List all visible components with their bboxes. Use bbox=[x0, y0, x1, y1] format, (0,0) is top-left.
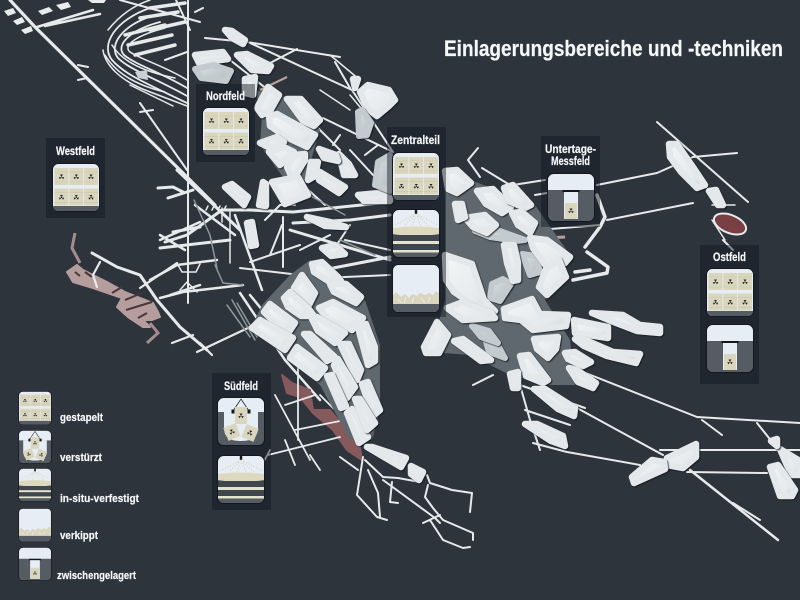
panel: Nordfeld bbox=[196, 84, 255, 162]
storage chambers: central east bbox=[472, 230, 540, 358]
icon: gestapelt bbox=[392, 152, 440, 200]
panel: Ostfeld bbox=[700, 245, 759, 384]
panel: Untertage-Messfeld: Messfeld bbox=[551, 154, 590, 168]
legend item: zwischengelagert: zwischengelagert bbox=[57, 570, 136, 582]
pink west chambers bbox=[67, 233, 160, 343]
legend item: zwischengelagert bbox=[19, 547, 136, 582]
panel: Zentralteil: Zentralteil bbox=[391, 133, 440, 147]
icon: verstürzt bbox=[218, 398, 264, 446]
icon: gestapelt bbox=[202, 108, 250, 156]
legend item: verstürzt: verstürzt bbox=[60, 452, 102, 464]
panel: Ostfeld: Ostfeld bbox=[713, 250, 746, 264]
legend item: verstürzt bbox=[19, 430, 102, 464]
cluster shadows beneath chambers bbox=[250, 90, 575, 440]
panel: Südfeld bbox=[212, 373, 271, 510]
panel: Nordfeld: Nordfeld bbox=[206, 89, 245, 103]
icon: verkippt bbox=[392, 264, 440, 312]
galleries north-east bbox=[205, 38, 393, 152]
legend item: in-situ-verfestigt: in-situ-verfestigt bbox=[60, 493, 139, 505]
spiral ramp north bbox=[103, 0, 203, 106]
legend item: gestapelt: gestapelt bbox=[60, 412, 103, 424]
panel: Westfeld: Westfeld bbox=[56, 144, 95, 158]
galleries west and north-west bbox=[10, 0, 320, 400]
pink south chamber bbox=[282, 375, 362, 460]
legend item: verkippt: verkippt bbox=[60, 530, 98, 542]
top-left small chambers bbox=[4, 0, 106, 34]
east field pink chamber with ring bbox=[711, 205, 749, 240]
icon: zwischengelagert bbox=[706, 324, 754, 372]
storage chambers: north field bbox=[195, 30, 395, 256]
icon: zwischengelagert bbox=[548, 174, 594, 222]
storage chambers: shaded north bbox=[195, 65, 390, 191]
panel: Zentralteil bbox=[387, 127, 446, 317]
icon: gestapelt bbox=[52, 164, 100, 212]
storage chambers: south field bbox=[252, 262, 423, 480]
panel: Untertage-Messfeld bbox=[541, 136, 600, 227]
panel: Südfeld: Südfeld bbox=[224, 379, 258, 393]
galleries south tail bbox=[262, 360, 473, 548]
legend item: gestapelt bbox=[19, 391, 103, 425]
legend bbox=[19, 391, 139, 582]
legend item: verkippt bbox=[19, 508, 98, 542]
icon: in-situ-verfestigt bbox=[392, 210, 440, 258]
galleries east bbox=[468, 122, 800, 540]
galleries centre bbox=[240, 120, 390, 278]
panel: Westfeld bbox=[46, 138, 105, 218]
icon: gestapelt bbox=[706, 268, 754, 316]
legend item: in-situ-verfestigt bbox=[19, 468, 139, 505]
icon: in-situ-verfestigt bbox=[218, 456, 264, 504]
panel: Untertage-Messfeld: Untertage- bbox=[545, 142, 596, 156]
